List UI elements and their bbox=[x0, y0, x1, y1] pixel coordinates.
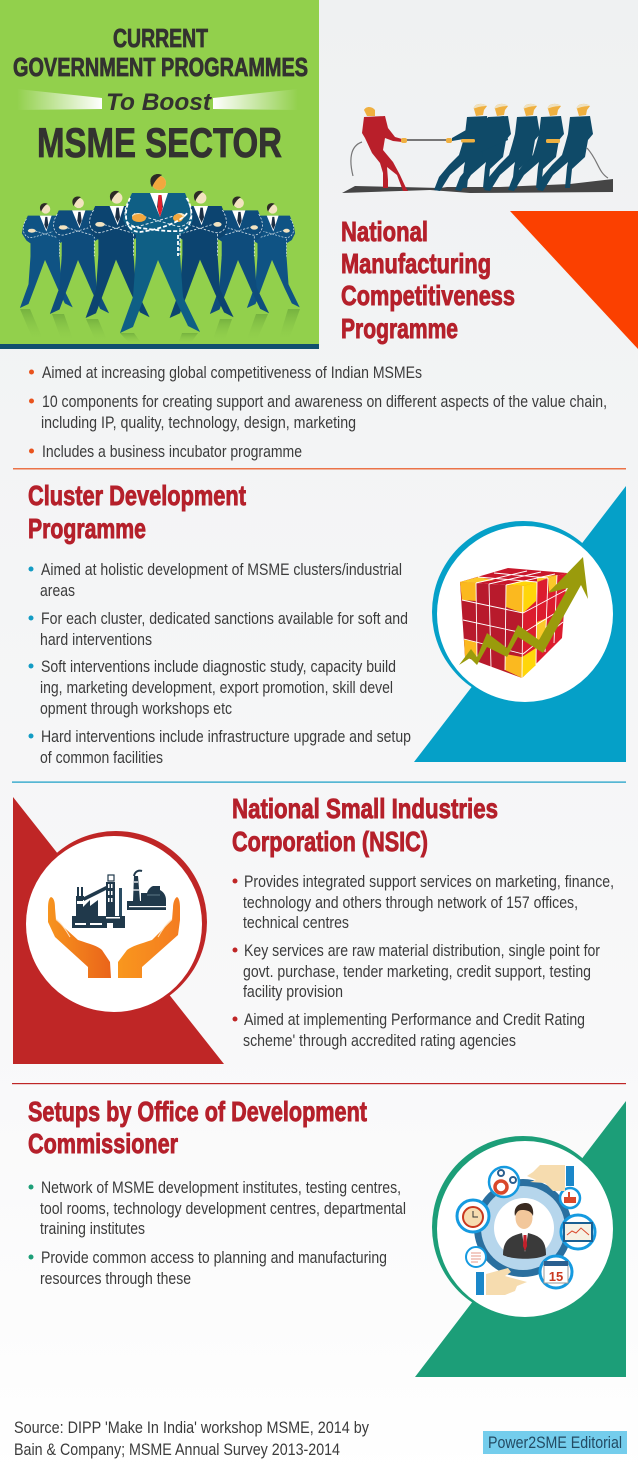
icon: top hand bbox=[527, 1165, 574, 1191]
text block: manufacturing bullets: Aimed at increasing global competitiveness of Indian MSMEs bbox=[42, 363, 422, 382]
text block: cluster bullets: Hard interventions include infrastructure upgrade and setup bbox=[41, 727, 411, 746]
heading: setups by office of development commissioner: Setups by Office of Development bbox=[28, 1096, 367, 1127]
panel: title bbox=[0, 0, 319, 349]
figure: blue puller 4 bbox=[508, 104, 564, 191]
text block: cluster bullets: areas bbox=[40, 581, 75, 600]
text block: setups bullets: resources through these bbox=[40, 1269, 191, 1288]
text block: cluster bullets: of common facilities bbox=[40, 748, 163, 767]
figure: red puller bbox=[362, 107, 408, 191]
text block: setups bullets: tool rooms, technology development centres, departmental bbox=[40, 1199, 406, 1218]
figure: businessman left bbox=[50, 196, 109, 314]
heading: nsic bbox=[232, 793, 498, 857]
heading: national manufacturing competitiveness programme: Competitiveness bbox=[341, 280, 515, 311]
icon: right hand bbox=[118, 897, 180, 978]
graphic: green triangle with person bbox=[415, 1101, 626, 1377]
reflections under figures bbox=[20, 309, 300, 344]
icon: left factory bbox=[72, 875, 125, 928]
text block: cluster bullets: For each cluster, dedicated sanctions available for soft and bbox=[41, 609, 408, 628]
icon: cube bbox=[460, 568, 567, 678]
text block: setups bullets: training institutes bbox=[40, 1219, 145, 1238]
text block: cluster bullets: Aimed at holistic development of MSME clusters/industrial bbox=[41, 560, 402, 579]
icon: factory badge bbox=[560, 1188, 580, 1208]
figure: businessman outer left bbox=[20, 203, 73, 308]
icon: calendar bbox=[540, 1256, 572, 1288]
left light ray bbox=[17, 89, 102, 110]
illustration: tug of war bbox=[342, 104, 613, 193]
figure: businessman right bbox=[210, 196, 269, 314]
text block: nsic bullets: scheme' through accredited rating agencies bbox=[243, 1031, 516, 1050]
text block: cluster bullets: opment through workshops etc bbox=[40, 699, 232, 718]
icon: right factory bbox=[127, 871, 166, 910]
text block: cluster bullets: Soft interventions include diagnostic study, capacity build bbox=[41, 657, 396, 676]
title line: current: CURRENT bbox=[113, 23, 208, 53]
right light ray bbox=[213, 89, 298, 110]
title bar bbox=[0, 344, 319, 349]
hands bbox=[446, 138, 560, 143]
heading: national manufacturing competitiveness programme: National bbox=[341, 216, 428, 247]
text block: manufacturing bullets: Includes a business incubator programme bbox=[42, 442, 302, 461]
heading: nsic: Corporation (NSIC) bbox=[232, 826, 428, 857]
heading: cluster development programme bbox=[28, 480, 246, 544]
text block: setups bullets: Provide common access to planning and manufacturing bbox=[41, 1248, 387, 1267]
text block: source: Bain & Company; MSME Annual Survey 2013-2014 bbox=[14, 1440, 340, 1459]
figure: blue puller 1 bbox=[434, 104, 508, 191]
triangle: orange corner bbox=[510, 211, 638, 349]
heading: cluster development programme: Cluster Development bbox=[28, 480, 246, 511]
title line: msme sector: MSME SECTOR bbox=[37, 119, 282, 166]
text block: cluster bullets bbox=[28, 560, 411, 767]
text block: manufacturing bullets bbox=[29, 363, 607, 461]
text block: nsic bullets: facility provision bbox=[243, 982, 343, 1001]
text block: cluster bullets: ing, marketing development, export promotion, skill devel bbox=[40, 678, 393, 697]
icon: calendar: 15 bbox=[549, 1269, 563, 1284]
ground bbox=[342, 179, 613, 193]
text block: manufacturing bullets: including IP, quality, technology, design, marketing bbox=[41, 413, 356, 432]
figure: businessman inner right bbox=[170, 191, 234, 318]
title line: government programmes: GOVERNMENT PROGRAMMES bbox=[13, 52, 308, 82]
figure: central businessman bbox=[120, 174, 200, 333]
arrow: growth bbox=[459, 557, 588, 665]
title line: to boost: To Boost bbox=[106, 89, 212, 116]
text block: source: Source: DIPP 'Make In India' workshop MSME, 2014 by bbox=[14, 1418, 369, 1437]
graphic: red triangle with hands bbox=[13, 797, 224, 1064]
graphic: blue triangle with cube bbox=[414, 486, 626, 762]
figure: businessman outer right bbox=[247, 203, 300, 308]
text block: setups bullets: Network of MSME development institutes, testing centres, bbox=[41, 1178, 401, 1197]
text block: nsic bullets: technical centres bbox=[243, 913, 349, 932]
figure: businessman inner left bbox=[86, 191, 150, 318]
text block: nsic bullets bbox=[232, 872, 614, 1050]
heading: nsic: National Small Industries bbox=[232, 793, 498, 824]
icon: list bbox=[466, 1247, 486, 1267]
icon: gears bbox=[489, 1167, 519, 1197]
icon: person bbox=[503, 1203, 546, 1259]
icon: bottom hand bbox=[476, 1268, 527, 1295]
text block: setups bullets bbox=[28, 1178, 406, 1288]
icon: ring bbox=[474, 1179, 572, 1277]
figure: blue puller 3 bbox=[484, 104, 540, 191]
heading: national manufacturing competitiveness programme: Programme bbox=[341, 313, 458, 344]
text block: cluster bullets: hard interventions bbox=[40, 630, 152, 649]
heading: national manufacturing competitiveness programme: Manufacturing bbox=[341, 248, 491, 279]
heading: setups by office of development commissioner: Commissioner bbox=[28, 1128, 178, 1159]
icon: monitor bbox=[561, 1215, 595, 1249]
text block: source bbox=[14, 1418, 369, 1459]
text block: nsic bullets: technology and others through network of 157 offices, bbox=[243, 893, 578, 912]
icon: clock bbox=[457, 1200, 489, 1232]
icon: left hand bbox=[48, 897, 111, 978]
figure: blue puller 2 bbox=[455, 104, 511, 191]
heading: setups by office of development commissioner bbox=[28, 1096, 367, 1159]
heading: national manufacturing competitiveness programme bbox=[341, 216, 515, 344]
figure: blue puller 5 bbox=[537, 104, 593, 191]
rope bbox=[351, 142, 608, 178]
heading: cluster development programme: Programme bbox=[28, 513, 146, 544]
